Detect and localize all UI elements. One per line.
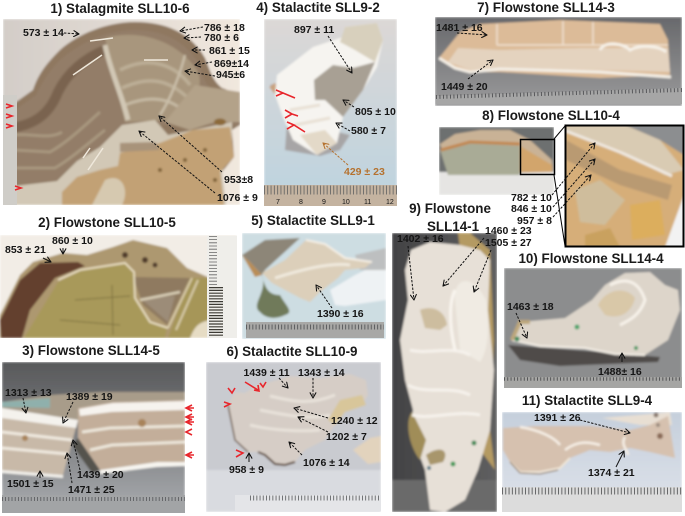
age label and arrow 1460 ± 23: 1460 ± 23: [485, 225, 532, 237]
heading: stalactite SLL10-9: 6) Stalactite SLL10-9: [227, 344, 357, 359]
panel: 4) Stalactite SLL9-2: [256, 0, 397, 206]
age label and arrow 1240 ± 12: 1240 ± 12: [331, 415, 378, 427]
age label and arrow 1471 ± 25: 1471 ± 25: [68, 484, 115, 496]
age label and arrow 1505 ± 27: [474, 237, 532, 292]
age label and arrow 860 ± 10: 860 ± 10: [52, 235, 93, 247]
heading: flowstone SLL14-1: SLL14-1: [427, 219, 480, 234]
ruler: right-hand scale: [207, 236, 237, 338]
ruler: bottom scale: 9: [322, 199, 326, 206]
photo: flowstone section: [504, 268, 682, 388]
age label and arrow 853 ± 21: 853 ± 21: [5, 244, 46, 256]
panel: 6) Stalactite SLL10-9: [206, 344, 381, 512]
heading: stalactite SLL9-1: 5) Stalactite SLL9-1: [251, 213, 375, 228]
age label and arrow 860 ± 10: [52, 235, 93, 254]
photo: broken flowstone blocks: [2, 362, 185, 513]
panel: 2) Flowstone SLL10-5: [0, 215, 237, 338]
age label and arrow 1076 ± 14: [289, 442, 350, 469]
age label and arrow 1313 ± 13: 1313 ± 13: [5, 387, 52, 399]
panel: 8) Flowstone SLL10-4: [439, 108, 684, 247]
age label and arrow 805 ± 10: [343, 100, 396, 118]
age label and arrow 869±14: [195, 58, 249, 70]
age label and arrow 846 ± 10: 846 ± 10: [511, 203, 552, 215]
ruler: bottom scale: [504, 377, 682, 388]
age label and arrow 1501 ± 15: 1501 ± 15: [7, 478, 54, 490]
age label and arrow 1202 ± 7: 1202 ± 7: [326, 431, 367, 443]
age label and arrow 957 ± 8: 957 ± 8: [517, 215, 552, 227]
photo: zoomed inset: [565, 125, 684, 247]
age label and arrow 958 ± 9: 958 ± 9: [229, 464, 264, 476]
photo: whole flowstone sample: [439, 127, 554, 195]
ruler: bottom scale: 7: [276, 199, 280, 206]
age label and arrow 780 ± 6: 780 ± 6: [204, 32, 239, 44]
age label and arrow 1439 ± 20: 1439 ± 20: [77, 469, 124, 481]
heading: flowstone SLL14-4: 10) Flowstone SLL14-4: [518, 251, 664, 266]
age label and arrow 1076 ± 9: 1076 ± 9: [217, 192, 258, 204]
red growth-stop arrows: [224, 382, 266, 457]
ruler: left edge scale: [3, 95, 17, 205]
photo: stalactite section: [502, 412, 682, 512]
age label and arrow 1439 ± 20: [73, 440, 124, 481]
ruler: bottom scale: 10: [342, 199, 350, 206]
ruler: bottom scale: [235, 495, 381, 511]
heading: stalactite SLL9-4: 11) Stalactite SLL9-4: [522, 393, 653, 408]
photo: stalactite section: [264, 19, 397, 206]
panel: 7) Flowstone SLL14-3: [435, 0, 682, 106]
age label and arrow 861 ± 15: 861 ± 15: [209, 45, 250, 57]
photo: stalactite section: [206, 362, 381, 512]
age label and arrow 1488± 16: [598, 353, 642, 378]
red growth-stop arrows: [6, 104, 21, 190]
heading: flowstone SLL14-1: 9) Flowstone: [409, 201, 491, 216]
age label and arrow 1449 ± 20: [441, 60, 493, 93]
age label and arrow 1076 ± 14: 1076 ± 14: [303, 457, 350, 469]
heading: flowstone SLL10-4: 8) Flowstone SLL10-4: [482, 108, 620, 123]
age label and arrow 1240 ± 12: [294, 408, 378, 427]
photo: flowstone slab: [435, 17, 682, 106]
age label and arrow 1076 ± 9: [139, 131, 258, 204]
age label and arrow 1439 ± 11: [244, 367, 290, 388]
panel: 1) Stalagmite SLL10-6: [3, 1, 258, 205]
age label and arrow 1402 ± 16: [397, 233, 444, 300]
photo: flowstone section: [0, 235, 237, 338]
age label and arrow 573 ± 14: 573 ± 14: [23, 27, 64, 39]
ruler: bottom scale: [264, 185, 397, 206]
age label and arrow 957 ± 8: [517, 175, 591, 227]
age label and arrow 786 ± 18: [180, 22, 245, 34]
heading: flowstone SLL10-5: 2) Flowstone SLL10-5: [38, 215, 176, 230]
ruler: bottom scale: 8: [299, 199, 303, 206]
age label and arrow 1343 ± 14: [298, 367, 345, 398]
photo: stalagmite section: [3, 19, 240, 205]
age label and arrow 853 ± 21: [5, 244, 51, 262]
age label and arrow 1391 ± 26: [534, 412, 630, 433]
age label and arrow 846 ± 10: [511, 159, 595, 215]
panel: 10) Flowstone SLL14-4: [504, 251, 682, 388]
heading: stalactite SLL9-2: 4) Stalactite SLL9-2: [256, 0, 380, 15]
age label and arrow 1439 ± 11: 1439 ± 11: [244, 367, 290, 379]
red growth-stop arrows: [276, 90, 305, 132]
age label and arrow 580 ± 7: [336, 123, 386, 137]
age label and arrow 1389 ± 19: 1389 ± 19: [66, 391, 113, 403]
age label and arrow 1449 ± 20: 1449 ± 20: [441, 81, 488, 93]
age label and arrow 1481 ± 16: 1481 ± 16: [436, 22, 483, 34]
age label and arrow 1374 ± 21: 1374 ± 21: [588, 467, 635, 479]
photo: stalactite section: [242, 233, 386, 339]
age label and arrow 1390 ± 16: [316, 285, 364, 320]
panel: 9) Flowstone SLL14-1: [392, 201, 532, 512]
age label and arrow 1471 ± 25: [67, 453, 115, 496]
ruler: bottom scale: 12: [386, 199, 394, 206]
age label and arrow 1390 ± 16: 1390 ± 16: [317, 308, 364, 320]
age label and arrow 429 ± 23: 429 ± 23: [344, 166, 385, 178]
heading: flowstone SLL14-5: 3) Flowstone SLL14-5: [22, 343, 160, 358]
age label and arrow 786 ± 18: 786 ± 18: [204, 22, 245, 34]
red growth-stop arrows: [186, 405, 194, 458]
age label and arrow 1391 ± 26: 1391 ± 26: [534, 412, 581, 424]
age label and arrow 869±14: 869±14: [214, 58, 249, 70]
age label and arrow 1313 ± 13: [5, 387, 52, 413]
age label and arrow 580 ± 7: 580 ± 7: [351, 125, 386, 137]
age label and arrow 1505 ± 27: 1505 ± 27: [485, 237, 532, 249]
ruler: bottom scale: 11: [364, 199, 371, 206]
heading: flowstone SLL14-3: 7) Flowstone SLL14-3: [477, 0, 615, 15]
age label and arrow 782 ± 10: [511, 143, 595, 204]
age label and arrow 805 ± 10: 805 ± 10: [355, 106, 396, 118]
ruler: bottom scale: [2, 495, 185, 513]
panel: 11) Stalactite SLL9-4: [502, 393, 682, 512]
age label and arrow 945±6: [185, 69, 245, 81]
ruler: bottom scale: [502, 487, 682, 512]
ruler: bottom scale: [246, 322, 384, 338]
age label and arrow 1463 ± 18: 1463 ± 18: [507, 301, 554, 313]
heading: stalagmite SLL10-6: 1) Stalagmite SLL10-6: [50, 1, 190, 16]
age label and arrow 782 ± 10: 782 ± 10: [511, 192, 552, 204]
zoom box and connector lines: [520, 126, 565, 246]
age label and arrow 945±6: 945±6: [216, 69, 245, 81]
age label and arrow 1463 ± 18: [507, 301, 554, 338]
age label and arrow 1389 ± 19: [63, 391, 113, 423]
age label and arrow 1374 ± 21: [588, 451, 635, 479]
age label and arrow 780 ± 6: [184, 32, 239, 44]
age label and arrow 1460 ± 23: [443, 225, 532, 286]
age label and arrow 958 ± 9: [229, 453, 264, 476]
age label and arrow 897 ± 11: [294, 24, 352, 73]
age label and arrow 429 ± 23: [323, 143, 385, 178]
age label and arrow 1501 ± 15: [7, 471, 54, 490]
age label and arrow 1488± 16: 1488± 16: [598, 366, 642, 378]
age label and arrow 897 ± 11: 897 ± 11: [294, 24, 334, 36]
panel: 5) Stalactite SLL9-1: [242, 213, 386, 339]
age label and arrow 953±8: 953±8: [224, 174, 253, 186]
age label and arrow 1343 ± 14: 1343 ± 14: [298, 367, 345, 379]
age label and arrow 1402 ± 16: 1402 ± 16: [397, 233, 444, 245]
panel: 3) Flowstone SLL14-5: [2, 343, 194, 513]
age label and arrow 953±8: [159, 116, 253, 186]
age label and arrow 1202 ± 7: [298, 417, 367, 443]
photo: flowstone section: [392, 233, 497, 512]
ruler: bottom scale: [436, 88, 682, 104]
